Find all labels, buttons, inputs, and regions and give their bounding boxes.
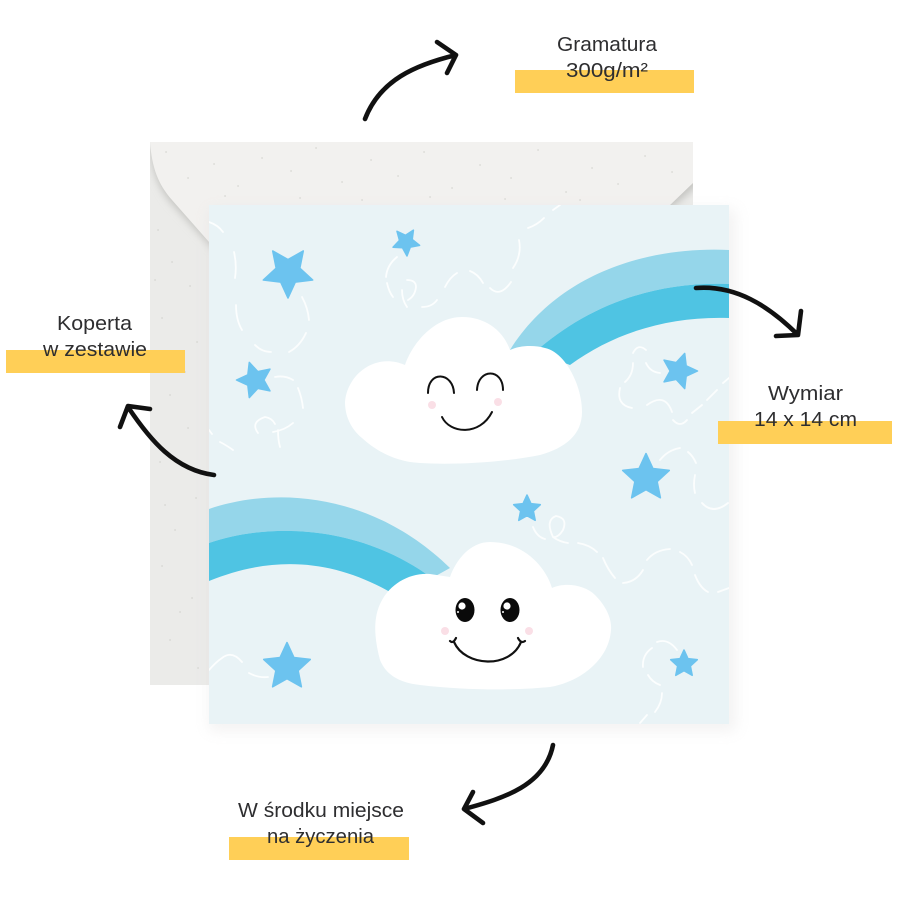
label: Gramatura bbox=[515, 34, 694, 93]
label: Wymiar: 14 x 14 cm bbox=[754, 409, 857, 431]
card shadow bbox=[209, 209, 736, 731]
label: Wymiar: Wymiar bbox=[768, 383, 843, 405]
label: Gramatura: Gramatura bbox=[557, 34, 658, 56]
arrow: to Koperta bbox=[120, 406, 214, 475]
white dashed swirls bbox=[209, 205, 729, 723]
greeting card bbox=[209, 205, 729, 724]
label: W środku miejsce: W środku miejsce bbox=[238, 800, 404, 822]
label: W środku miejsce: na życzenia bbox=[267, 826, 375, 848]
label: Koperta bbox=[6, 313, 185, 373]
arrow: to W środku bbox=[464, 745, 553, 823]
label: Koperta: w zestawie bbox=[42, 339, 147, 361]
envelope bbox=[150, 142, 697, 685]
stars bbox=[236, 230, 698, 687]
label: Gramatura: 300g/m² bbox=[566, 60, 648, 82]
cloud with open eyes bbox=[375, 542, 611, 689]
arrow: to Gramatura bbox=[365, 42, 456, 119]
rainbow bottom left bbox=[209, 497, 450, 592]
envelope flap bbox=[150, 142, 693, 242]
rainbow top right bbox=[510, 250, 729, 365]
label: Wymiar bbox=[718, 383, 892, 444]
label: Koperta: Koperta bbox=[57, 313, 133, 335]
label: W środku miejsce bbox=[229, 800, 409, 860]
cloud with closed eyes bbox=[345, 317, 582, 464]
arrow: to Wymiar bbox=[696, 288, 801, 336]
